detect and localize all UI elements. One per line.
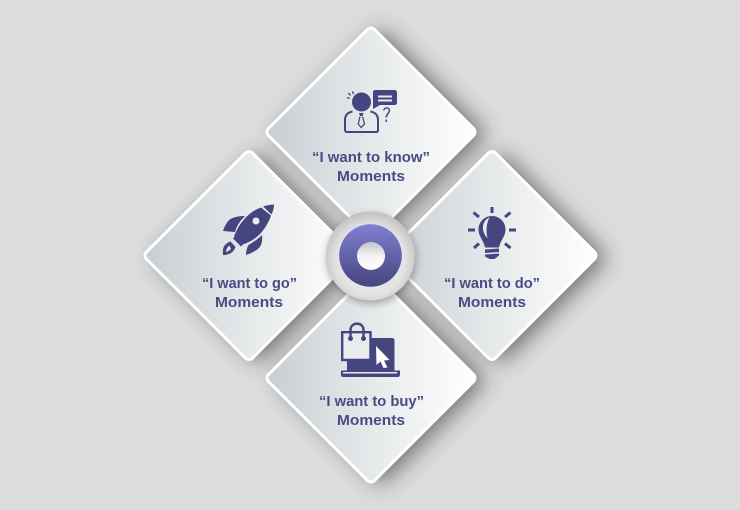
label: Moments <box>215 294 283 311</box>
label: “I want to do” <box>444 275 540 292</box>
card shadows <box>153 28 608 486</box>
panel: I want to go <box>143 149 355 362</box>
panel: I want to know <box>265 26 477 238</box>
label: “I want to know” <box>312 149 430 166</box>
label <box>202 275 297 311</box>
icon: rocket <box>223 204 274 255</box>
label: Moments <box>337 168 405 185</box>
hub ring <box>339 224 402 287</box>
label: Moments <box>337 412 405 429</box>
icon: person with question <box>345 90 397 132</box>
icon: shopping bag and laptop <box>341 324 400 377</box>
label: “I want to buy” <box>319 393 424 410</box>
panel: I want to buy <box>265 272 477 484</box>
label <box>444 275 540 311</box>
label <box>312 149 430 185</box>
hub hole <box>357 242 385 270</box>
label: Moments <box>458 294 526 311</box>
label: “I want to go” <box>202 275 297 292</box>
label <box>319 393 424 429</box>
center hub <box>326 212 416 304</box>
icon: light bulb <box>468 207 516 259</box>
panel: I want to do <box>386 149 598 362</box>
